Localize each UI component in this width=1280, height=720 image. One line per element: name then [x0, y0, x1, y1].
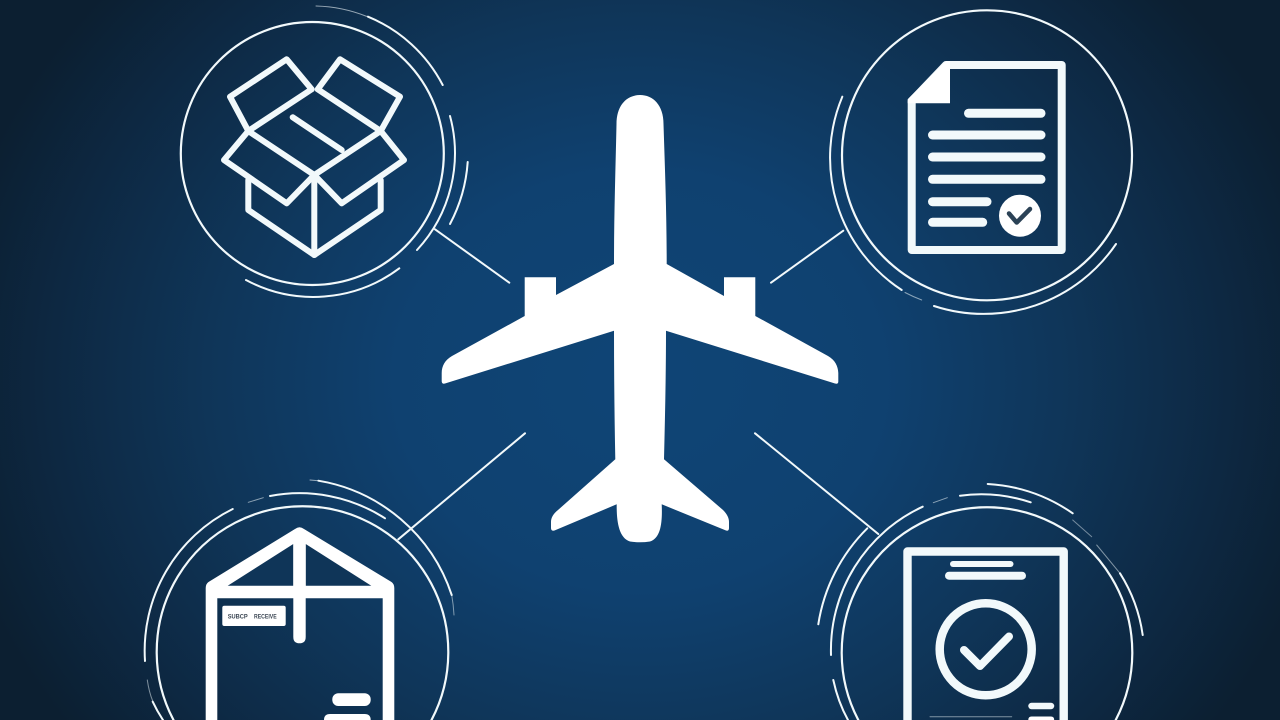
ring: [842, 507, 1132, 720]
check badge: [999, 195, 1041, 237]
signature line: [930, 716, 1012, 718]
panel: approved certificate: [818, 484, 1143, 720]
check circle: [940, 603, 1032, 695]
shipping label: [222, 606, 286, 626]
check mark: [1009, 209, 1030, 222]
panel: document with check: [830, 10, 1132, 314]
connector: bottom-right: [755, 433, 878, 534]
label bars: [324, 693, 371, 720]
panel: open box: [181, 6, 468, 297]
orbit arcs: [818, 484, 1143, 720]
orbit arcs: [145, 480, 454, 720]
check mark: [964, 636, 1009, 666]
orbit arcs: [830, 97, 1116, 314]
orbit arcs: [246, 6, 468, 297]
shipping label: SUBCP: [228, 614, 248, 620]
icon: certificate: [908, 552, 1064, 720]
icon: airplane: [442, 95, 838, 542]
connector: bottom-left: [398, 433, 525, 539]
icon: open cardboard box: [224, 59, 404, 255]
page fold: [908, 61, 950, 103]
shipping label: RECEIVE: [254, 614, 277, 620]
footer bars: [1032, 703, 1051, 709]
panel: sealed parcel with label: [145, 480, 454, 720]
connector: top-left: [435, 229, 509, 283]
ring: [181, 22, 444, 285]
text lines: [932, 113, 1041, 222]
ring: [157, 506, 448, 720]
icon: document: [908, 61, 1062, 250]
connector: top-right: [771, 231, 843, 283]
icon: parcel box: [206, 527, 394, 720]
ring: [842, 10, 1132, 300]
header lines: [953, 561, 1010, 567]
